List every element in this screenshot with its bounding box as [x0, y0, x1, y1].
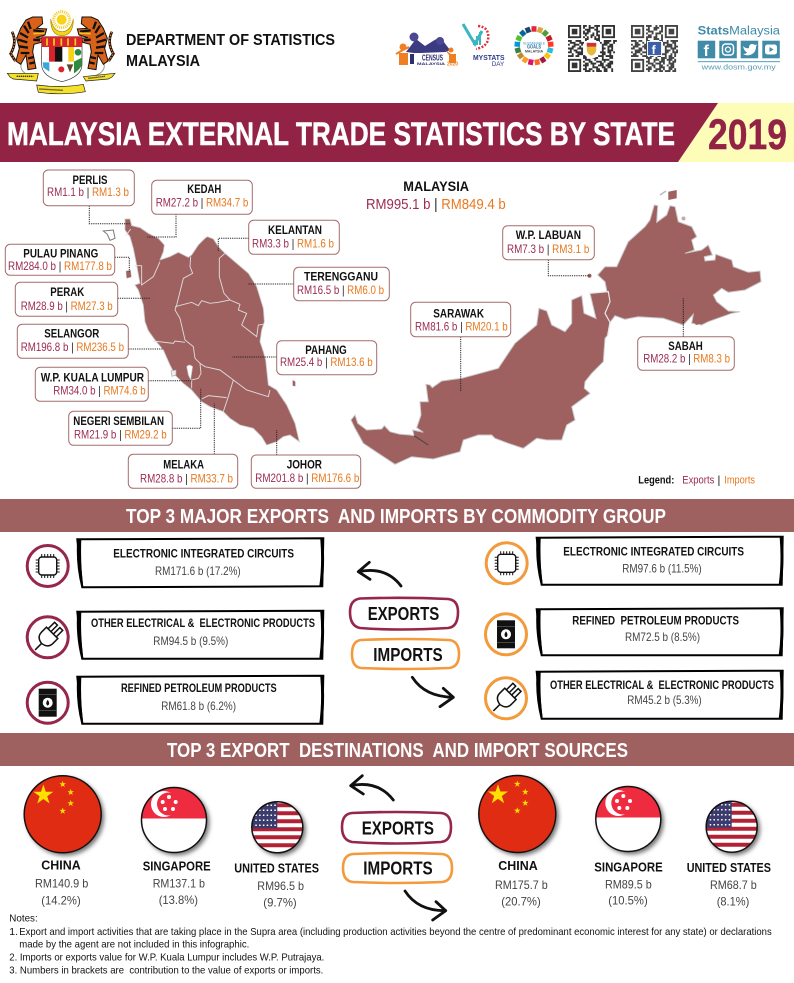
legend: Exports	[682, 474, 715, 486]
label: imports, commodity	[352, 639, 459, 669]
callout: Johor: JOHOR	[287, 457, 322, 471]
label: exports, commodity	[350, 598, 458, 630]
section heading: commodity group: TOP 3 MAJOR EXPORTS AND IMPORTS BY COMMODITY GROUP	[126, 506, 666, 528]
callout: Kedah: RM27.2 b | RM34.7 b	[156, 196, 249, 210]
legend: |	[718, 474, 720, 486]
map: east Malaysia	[351, 190, 761, 464]
section heading: destinations and sources: TOP 3 EXPORT DESTINATIONS AND IMPORT SOURCES	[167, 740, 628, 762]
callout: W.P. Kuala Lumpur	[35, 367, 148, 401]
callout: Johor	[251, 455, 361, 488]
logo: sustainable development goals wheel: MALAYSIA	[525, 50, 543, 54]
arrow: imports direction, sources	[405, 891, 446, 920]
label: United States exports	[234, 861, 319, 910]
callout: Malaysia total: RM995.1 b | RM849.4 b	[366, 196, 506, 213]
callout: Terengganu	[294, 267, 389, 301]
panel: top import commodity 3: RM45.2 b (5.3%)	[627, 693, 702, 707]
legend	[638, 474, 755, 486]
label: exports, destinations: EXPORTS	[362, 818, 434, 838]
label: China exports: CHINA	[41, 857, 81, 872]
legend: Imports	[724, 474, 755, 486]
logo: coat of arms of Malaysia	[7, 12, 115, 94]
callout: W.P. Kuala Lumpur: RM34.0 b | RM74.6 b	[53, 383, 146, 397]
label: exports, destinations	[342, 812, 451, 844]
callout: Kelantan: KELANTAN	[268, 223, 322, 237]
callout: W.P. Labuan: RM7.3 b | RM3.1 b	[507, 242, 590, 256]
label: Singapore exports	[143, 859, 211, 907]
label: Singapore imports: RM89.5 b	[605, 877, 652, 891]
panel: top export commodity 3: REFINED PETROLEUM PRODUCTS	[121, 683, 277, 695]
callout: Kelantan: RM3.3 b | RM1.6 b	[252, 237, 334, 251]
callout: Sarawak: RM81.6 b | RM20.1 b	[415, 320, 508, 334]
label: United States exports: RM96.5 b	[257, 879, 304, 893]
panel: top export commodity 3	[77, 676, 324, 724]
logo: census 2020: MALAYSIA	[417, 62, 446, 66]
icon: oil barrel export	[27, 682, 68, 723]
callout: Pahang: PAHANG	[305, 343, 347, 357]
notes	[9, 913, 772, 977]
label: United States imports: (8.1%)	[717, 895, 749, 909]
notes: 1.	[9, 926, 18, 938]
logo: sustainable development goals wheel: GOALS	[527, 45, 542, 51]
callout: W.P. Labuan: W.P. LABUAN	[516, 228, 581, 242]
label: imports, destinations: IMPORTS	[363, 858, 433, 878]
label: Singapore imports: (10.5%)	[608, 893, 648, 907]
label: United States imports: UNITED STATES	[687, 860, 771, 875]
panel: top export commodity 1	[77, 538, 324, 587]
QR code: facebook	[631, 25, 678, 72]
callout: Negeri Sembilan: NEGERI SEMBILAN	[73, 414, 164, 428]
callout: Pulau Pinang	[5, 244, 115, 275]
logo: sustainable development goals wheel: SUSTAINABLE	[523, 42, 546, 46]
callout: Johor: RM201.8 b | RM176.6 b	[255, 471, 360, 485]
label: Singapore imports: SINGAPORE	[594, 860, 663, 875]
callout: Pulau Pinang: PULAU PINANG	[23, 247, 98, 261]
callout: Sabah	[638, 337, 734, 370]
logo: mystats day	[463, 24, 505, 68]
logo: census 2020: 2020	[447, 62, 458, 68]
callout: Perak	[15, 282, 118, 316]
callout: Perlis: RM1.1 b | RM1.3 b	[47, 185, 129, 199]
callout: Melaka	[128, 454, 238, 488]
callout: Melaka: RM28.8 b | RM33.7 b	[140, 471, 233, 485]
QR code: facebook: f	[652, 43, 657, 57]
logo: census 2020: CENSUS	[422, 52, 443, 62]
panel: top export commodity 2: RM94.5 b (9.5%)	[153, 634, 228, 648]
logo: mystats day: MYSTATS	[473, 53, 504, 62]
logo: StatsMalaysia social media: www.dosm.gov.my	[701, 62, 776, 71]
callout: Pahang: RM25.4 b | RM13.6 b	[280, 355, 373, 369]
panel: top import commodity 2: RM72.5 b (8.5%)	[625, 630, 700, 644]
logo: census 2020	[396, 32, 458, 68]
notes: 3. Numbers in brackets are contribution to the value of exports or imports.	[9, 965, 323, 977]
label: United States imports	[687, 860, 771, 909]
callout: Kelantan	[249, 220, 339, 254]
logo: mystats day: DAY	[492, 61, 505, 68]
legend: Legend:	[638, 474, 674, 486]
icon: plug export	[27, 617, 68, 658]
arrow: exports direction, commodity	[358, 562, 401, 586]
label: Singapore exports: SINGAPORE	[143, 859, 211, 874]
notes: Notes:	[9, 913, 38, 925]
panel: top import commodity 1: RM97.6 b (11.5%)	[622, 562, 702, 576]
panel: top export commodity 2	[77, 611, 324, 659]
panel: top export commodity 1: ELECTRONIC INTEGRATED CIRCUITS	[113, 549, 294, 561]
callout: Terengganu: RM16.5 b | RM6.0 b	[297, 283, 384, 297]
label: Singapore exports: RM137.1 b	[153, 876, 205, 890]
label: imports, commodity: IMPORTS	[373, 645, 443, 665]
label: exports, commodity: EXPORTS	[368, 604, 439, 624]
panel: top import commodity 2	[536, 608, 784, 655]
callout: Negeri Sembilan: RM21.9 b | RM29.2 b	[74, 427, 167, 441]
callout: Pahang	[277, 341, 377, 375]
flag: Singapore import	[595, 786, 664, 854]
callout: Sabah: RM28.2 b | RM8.3 b	[643, 352, 730, 366]
logo: StatsMalaysia social media	[698, 25, 781, 71]
notes: 2. Imports or exports value for W.P. Kuala Lumpur includes W.P. Putrajaya.	[9, 951, 324, 963]
section heading: commodity group	[0, 499, 794, 532]
flag: Singapore export	[141, 787, 210, 856]
logo: StatsMalaysia social media: f	[704, 43, 710, 60]
callout: W.P. Labuan	[503, 226, 594, 260]
panel: top import commodity 1	[536, 537, 784, 585]
label: China exports	[35, 857, 89, 907]
callout: Kedah	[152, 180, 252, 214]
callout: W.P. Kuala Lumpur: W.P. KUALA LUMPUR	[41, 371, 144, 385]
map: Langkawi island	[103, 230, 115, 240]
arrow: imports direction, commodity	[412, 677, 453, 707]
header: department name: DEPARTMENT OF STATISTICS	[126, 32, 335, 49]
header: department name	[126, 32, 335, 70]
flag: China import	[479, 776, 559, 856]
label: imports, destinations	[343, 853, 452, 883]
section heading: destinations and sources	[0, 733, 794, 766]
callout: Negeri Sembilan	[69, 411, 172, 445]
label: Singapore imports	[594, 860, 663, 907]
panel: top import commodity 2: REFINED PETROLEUM PRODUCTS	[572, 616, 739, 628]
callout: Sabah: SABAH	[668, 339, 703, 353]
callout: Pulau Pinang: RM284.0 b | RM177.8 b	[8, 259, 112, 273]
icon: chip import	[486, 543, 527, 584]
callout: Kedah: KEDAH	[187, 182, 221, 196]
callout: Malaysia total: MALAYSIA	[403, 178, 469, 194]
notes: made by the agent are not included in this infographic.	[19, 939, 249, 951]
label: China imports: (20.7%)	[501, 895, 541, 909]
callout: Sarawak: SARAWAK	[433, 307, 484, 321]
label: China exports: RM140.9 b	[35, 877, 89, 891]
map: peninsular Malaysia	[125, 219, 299, 445]
connector lines	[89, 206, 683, 455]
callout: Selangor: RM196.8 b | RM236.5 b	[21, 340, 124, 354]
header: department name: MALAYSIA	[126, 53, 200, 70]
label: China imports	[495, 858, 548, 909]
callout: Terengganu: TERENGGANU	[304, 270, 378, 284]
panel: top export commodity 2: OTHER ELECTRICAL & ELECTRONIC PRODUCTS	[91, 618, 315, 630]
label: China imports: RM175.7 b	[495, 878, 548, 892]
callout: Melaka: MELAKA	[163, 457, 204, 471]
panel: top export commodity 3: RM61.8 b (6.2%)	[161, 699, 236, 713]
callout: Selangor	[17, 324, 128, 358]
logo: StatsMalaysia social media: Stats Malaysia	[698, 25, 781, 37]
logo: sustainable development goals wheel	[515, 26, 553, 65]
callout: Perak: RM28.9 b | RM27.3 b	[21, 299, 113, 313]
label: United States exports: UNITED STATES	[234, 861, 319, 876]
flag: United States export	[251, 801, 306, 856]
icon: oil barrel import	[486, 614, 526, 655]
label: China exports: (14.2%)	[41, 893, 81, 907]
callout: Perlis: PERLIS	[72, 173, 108, 187]
callout: Selangor: SELANGOR	[44, 327, 100, 341]
panel: top import commodity 3	[536, 671, 784, 719]
callout: Sarawak	[411, 302, 511, 337]
callout: Malaysia total	[366, 178, 506, 213]
flag: China export	[24, 776, 104, 856]
QR code: website	[568, 25, 617, 72]
panel: top export commodity 1: RM171.6 b (17.2%)	[155, 564, 241, 578]
label: China imports: CHINA	[498, 858, 538, 873]
callout: Perak: PERAK	[50, 285, 85, 299]
label: United States imports: RM68.7 b	[710, 878, 757, 892]
panel: top import commodity 1: ELECTRONIC INTEGRATED CIRCUITS	[563, 547, 744, 559]
label: Singapore exports: (13.8%)	[159, 893, 198, 907]
arrow: exports direction, destinations	[351, 776, 393, 800]
callout: Perlis	[43, 170, 134, 206]
icon: plug import	[486, 678, 526, 719]
icon: chip export	[27, 546, 68, 586]
title banner	[0, 103, 794, 162]
label: United States exports: (9.7%)	[263, 896, 297, 910]
flag: United States import	[706, 801, 760, 855]
